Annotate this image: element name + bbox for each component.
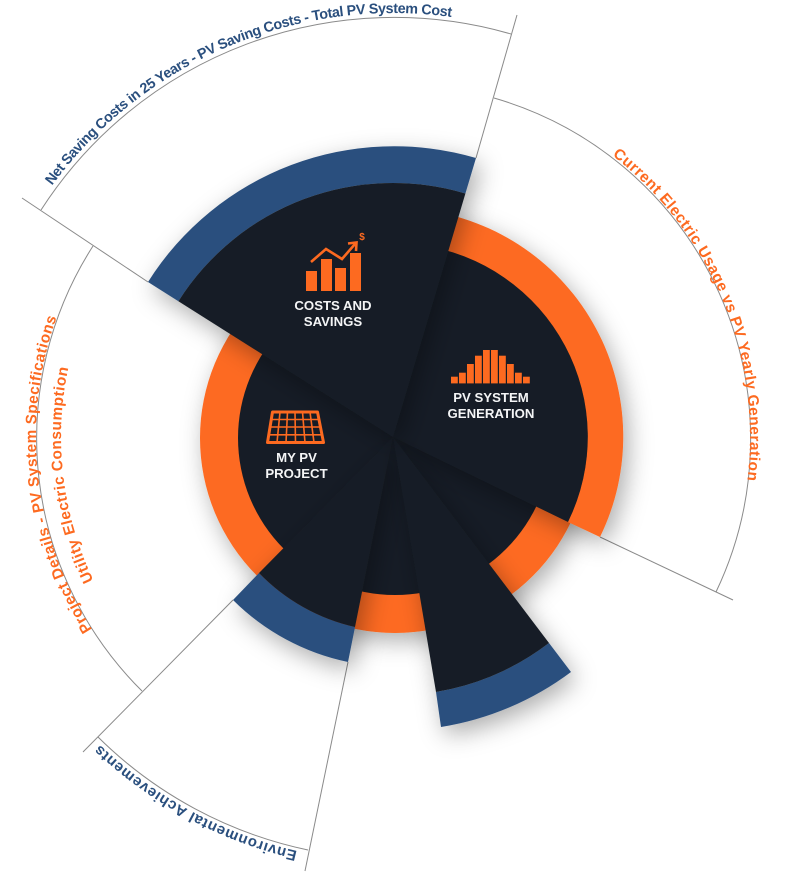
curved label: net saving costs: Net Saving Costs in 25 Years - PV Saving Costs - Total PV System Cost — [44, 4, 452, 185]
guide: generation sector outline — [494, 98, 751, 600]
heading: pv system generation: PV SYSTEM — [453, 390, 529, 405]
panel: blue lower-left wedge — [233, 437, 393, 662]
icon: rising bars with arrow: $ — [359, 232, 365, 243]
panel: my pv project base disc — [200, 243, 590, 633]
panel: costs and savings wedge — [148, 146, 476, 437]
curved label: project details: Project Details - PV System Specifications — [26, 316, 92, 634]
guide: costs sector outline — [22, 15, 517, 282]
heading: costs and savings: SAVINGS — [304, 314, 362, 329]
guide: project sector outline — [37, 246, 142, 691]
heading: my pv project: PROJECT — [265, 466, 328, 481]
icon: generation bars — [451, 350, 530, 383]
icon: rising bars with arrow — [306, 232, 365, 291]
panel: blue lower-right wedge — [393, 437, 571, 727]
icon: solar panel — [268, 412, 324, 442]
heading: pv system generation: GENERATION — [448, 406, 534, 421]
panel: pv system generation wedge — [393, 210, 623, 537]
heading: costs and savings: COSTS AND — [294, 298, 372, 313]
heading: my pv project: MY PV — [276, 450, 317, 465]
curved label: environmental achievements: Environmental Achievements — [96, 746, 296, 861]
curved label: utility consumption: Utility Electric Consumption — [52, 368, 92, 584]
guide: environmental sector outline — [83, 600, 348, 871]
curved label: current usage vs generation: Current Electric Usage vs PV Yearly Generation — [614, 149, 760, 480]
